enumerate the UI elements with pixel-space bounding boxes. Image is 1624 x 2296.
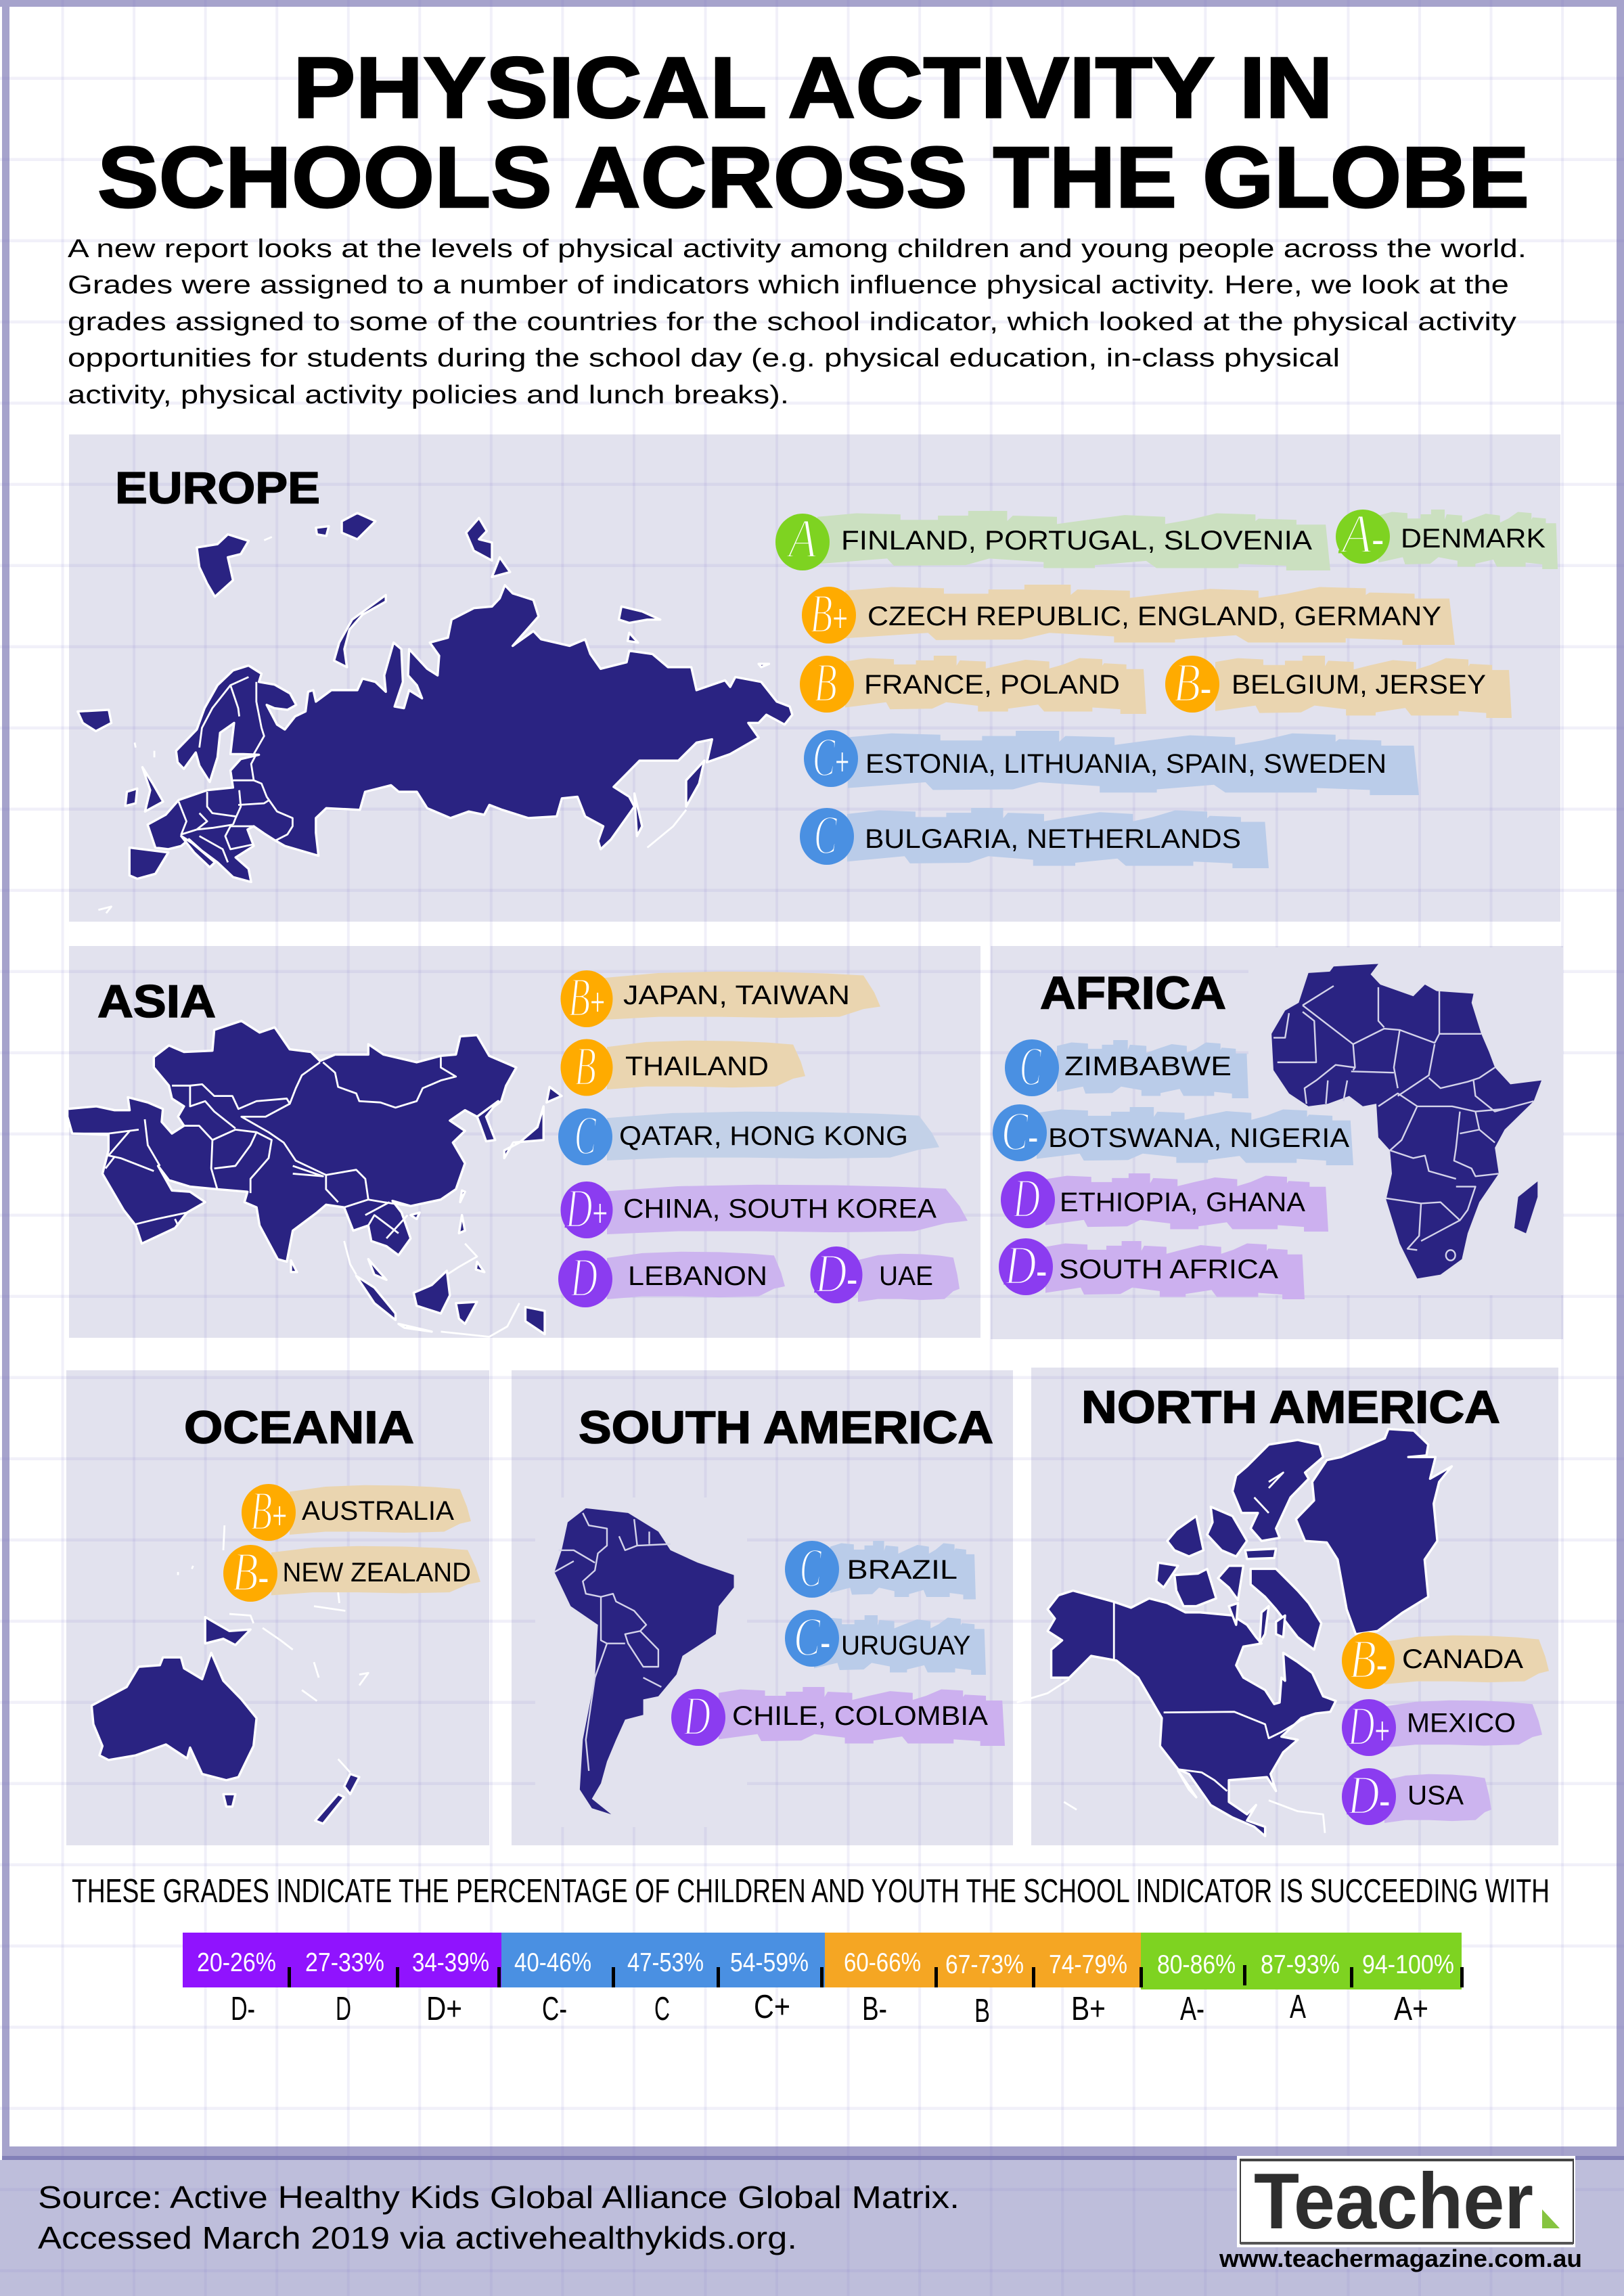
intro text: opportunities for students during the school day (e.g. physical education, in-class physical (68, 344, 1340, 373)
panel: South America (554, 1402, 1005, 1814)
grade scale letters: A- (1180, 1991, 1204, 2027)
grade scale letters: B (974, 1993, 990, 2029)
grade D+: Mexico: D+ (1347, 1695, 1390, 1757)
grade scale letters (231, 1989, 1428, 2029)
grade A-: Denmark: DENMARK (1401, 524, 1546, 554)
grade B: Thailand (560, 1035, 805, 1097)
panel: Oceania (91, 1402, 480, 1824)
grade B+: Japan, Taiwan (560, 966, 880, 1028)
grade scale bar: 34-39% (412, 1948, 489, 1977)
grade C-: Uruguay: C- (794, 1606, 830, 1667)
grade B: Thailand: B (574, 1035, 596, 1097)
grade D: Ethiopia, Ghana: ETHIOPIA, GHANA (1060, 1188, 1305, 1217)
panel: Asia (68, 966, 968, 1337)
map: South America (554, 1508, 734, 1814)
grade A: Finland, Portugal, Slovenia: FINLAND, PORTUGAL, SLOVENIA (841, 526, 1312, 556)
source text (38, 2180, 960, 2255)
grade C: Bulgaria, Netherlands (800, 804, 1269, 868)
grade C: Zimbabwe (1005, 1035, 1248, 1098)
grade C: Qatar, Hong Kong: QATAR, HONG KONG (619, 1121, 908, 1151)
grade B-: New Zealand: B- (232, 1541, 269, 1602)
grade scale bar: 27-33% (305, 1948, 384, 1977)
grade scale letters: C+ (754, 1989, 790, 2025)
grade A: Finland, Portugal, Slovenia (775, 508, 1330, 570)
grade C+: Estonia, Lithuania, Spain, Sweden: ESTONIA, LITHUANIA, SPAIN, SWEDEN (865, 749, 1386, 779)
grade scale letters: C (654, 1991, 670, 2027)
grade D+: China, South Korea: CHINA, SOUTH KOREA (623, 1194, 937, 1223)
heading: Oceania: OCEANIA (184, 1402, 414, 1454)
grade scale letters: B+ (1071, 1991, 1106, 2027)
grade scale bar: 20-26% (197, 1948, 276, 1977)
panel: North America (1017, 1382, 1549, 1836)
map: North America (1017, 1429, 1452, 1836)
grade B+: Czech Republic, England, Germany (802, 583, 1455, 645)
grade C: Bulgaria, Netherlands: BULGARIA, NETHERLANDS (865, 824, 1241, 854)
grade D-: South Africa (999, 1234, 1305, 1299)
grade scale letters: D- (231, 1991, 255, 2027)
footer background (0, 2146, 1624, 2296)
grade scale bar (183, 1933, 1464, 1989)
grade scale letters: C- (542, 1991, 567, 2027)
grade D+: China, South Korea: D+ (565, 1177, 608, 1239)
grade scale bar: 67-73% (945, 1950, 1024, 1979)
grade D-: South Africa: SOUTH AFRICA (1059, 1255, 1278, 1284)
grade scale bar: 74-79% (1049, 1950, 1127, 1979)
source text: Source: Active Healthy Kids Global Alliance Global Matrix. (38, 2180, 960, 2215)
grade C: Qatar, Hong Kong (558, 1104, 939, 1166)
source text: Accessed March 2019 via activehealthykids.org. (38, 2220, 797, 2255)
grade D-: USA: D- (1347, 1764, 1390, 1826)
grade C: Bulgaria, Netherlands: C (814, 804, 838, 865)
grade B: Thailand: THAILAND (625, 1052, 769, 1081)
grade B-: Canada: B- (1349, 1628, 1387, 1690)
panel: Europe (78, 463, 1558, 913)
map: Europe and Russia (78, 513, 792, 913)
grade C-: Botswana, Nigeria (993, 1100, 1353, 1165)
grade B+: Czech Republic, England, Germany: B+ (810, 583, 848, 644)
intro text: activity, physical activity policies and lunch breaks). (68, 381, 789, 409)
heading: Africa: AFRICA (1040, 968, 1226, 1019)
grade scale bar: 87-93% (1261, 1950, 1340, 1979)
grade scale letters: D+ (426, 1991, 462, 2027)
intro text: grades assigned to some of the countries for the school indicator, which looked at the physical activity (68, 308, 1516, 336)
grade C: Brazil: BRAZIL (847, 1555, 957, 1585)
grade B: France, Poland: B (814, 652, 837, 713)
title: PHYSICAL ACTIVITY IN (293, 39, 1333, 137)
grade B-: Belgium, Jersey (1165, 652, 1512, 718)
grade B+: Japan, Taiwan: JAPAN, TAIWAN (623, 981, 850, 1010)
grade C: Brazil (785, 1537, 976, 1600)
grade C-: Botswana, Nigeria: BOTSWANA, NIGERIA (1048, 1123, 1349, 1153)
intro text (68, 235, 1527, 409)
grade D-: UAE (811, 1242, 960, 1304)
grade D: Chile, Colombia: D (683, 1685, 710, 1747)
grade A-: Denmark: A- (1339, 503, 1384, 564)
grade scale bar: 60-66% (844, 1948, 921, 1977)
grade B+: Australia: B+ (250, 1480, 287, 1541)
grade D: Ethiopia, Ghana: D (1012, 1167, 1040, 1229)
title (97, 39, 1529, 226)
grade C: Qatar, Hong Kong: C (574, 1104, 597, 1166)
grade D: Lebanon (558, 1246, 785, 1308)
heading: North America: NORTH AMERICA (1081, 1382, 1500, 1433)
grade D-: South Africa: D- (1004, 1234, 1047, 1296)
grade C-: Uruguay (785, 1606, 986, 1675)
grade B+: Australia: AUSTRALIA (302, 1496, 454, 1526)
grade scale bar: 40-46% (514, 1948, 591, 1977)
grade D+: China, South Korea (560, 1177, 968, 1239)
grade scale letters: A (1290, 1989, 1306, 2025)
grade B-: New Zealand: NEW ZEALAND (283, 1558, 471, 1588)
grade B: France, Poland (800, 652, 1146, 714)
grade scale bar: 47-53% (627, 1948, 704, 1977)
grade D: Lebanon: D (570, 1246, 597, 1308)
heading: South America: SOUTH AMERICA (579, 1402, 993, 1454)
heading: Europe: EUROPE (115, 463, 320, 513)
map: Oceania (91, 1525, 368, 1824)
map: Asia (68, 1021, 562, 1337)
grade B: France, Poland: FRANCE, POLAND (864, 670, 1120, 700)
grade D+: Mexico: MEXICO (1407, 1708, 1516, 1738)
grade C-: Uruguay: URUGUAY (841, 1631, 970, 1661)
grade D: Chile, Colombia: CHILE, COLOMBIA (732, 1701, 988, 1731)
grade D-: USA: USA (1407, 1781, 1464, 1811)
grade scale letters: B- (862, 1991, 887, 2027)
grade B-: Canada: CANADA (1402, 1644, 1523, 1674)
grade scale bar: 80-86% (1157, 1950, 1236, 1979)
grade C: Zimbabwe: ZIMBABWE (1064, 1052, 1232, 1081)
grade C+: Estonia, Lithuania, Spain, Sweden: C+ (813, 726, 849, 788)
grade B-: Belgium, Jersey: BELGIUM, JERSEY (1232, 670, 1486, 700)
panel backgrounds (66, 434, 1563, 1845)
grade D-: UAE: UAE (879, 1261, 933, 1291)
grade scale letters: D (336, 1991, 351, 2027)
intro text: Grades were assigned to a number of indicators which influence physical activity. Here, we look at the (68, 271, 1509, 299)
grade scale bar: 54-59% (730, 1948, 809, 1977)
intro text: A new report looks at the levels of physical activity among children and young people across the world. (68, 235, 1527, 263)
grade B-: Belgium, Jersey: B- (1173, 652, 1211, 713)
grade D: Ethiopia, Ghana (1001, 1167, 1328, 1232)
panel: Africa (993, 964, 1541, 1299)
grade C+: Estonia, Lithuania, Spain, Sweden (804, 726, 1419, 795)
grade D+: Mexico (1342, 1695, 1542, 1757)
grade C-: Botswana, Nigeria: C- (1001, 1100, 1038, 1162)
grade B-: New Zealand (223, 1541, 480, 1602)
heading: Asia: ASIA (97, 976, 216, 1027)
grade B-: Canada (1342, 1628, 1549, 1690)
website url: www.teachermagazine.com.au (1219, 2245, 1582, 2272)
grade C: Brazil: C (800, 1537, 822, 1598)
map: Africa (1271, 964, 1541, 1278)
grade D-: UAE: D- (815, 1242, 857, 1304)
grade scale bar: 94-100% (1362, 1950, 1454, 1979)
grade D-: USA (1342, 1764, 1491, 1826)
grade scale letters: A+ (1394, 1991, 1428, 2027)
grade C: Zimbabwe: C (1020, 1035, 1042, 1097)
logo: Teacher: Teacher (1254, 2157, 1533, 2245)
grade B+: Japan, Taiwan: B+ (568, 966, 605, 1028)
title: SCHOOLS ACROSS THE GLOBE (97, 129, 1529, 226)
grade D: Lebanon: LEBANON (628, 1261, 767, 1291)
grade B+: Australia (242, 1480, 471, 1541)
grade A: Finland, Portugal, Slovenia: A (786, 508, 817, 569)
grade B+: Czech Republic, England, Germany: CZECH REPUBLIC, ENGLAND, GERMANY (867, 602, 1441, 631)
grade A-: Denmark (1336, 503, 1558, 569)
grade D: Chile, Colombia (671, 1685, 1005, 1747)
